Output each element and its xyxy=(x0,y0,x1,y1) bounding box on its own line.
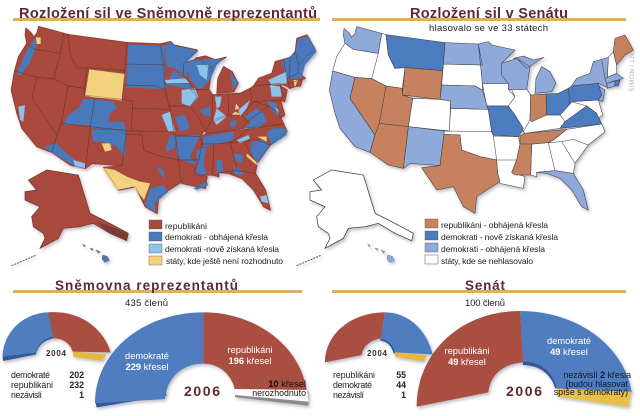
legend: Senate map: státy, kde se nehlasovalo xyxy=(441,256,533,266)
table: Senate 2004: republikáni xyxy=(333,370,375,380)
table: Senate 2004: 55 xyxy=(396,370,406,380)
title: Senate map: Rozložení sil v Senátu xyxy=(410,6,568,22)
labels: Senate 2006: spíše s demokraty) xyxy=(554,387,628,397)
legend: Senate map xyxy=(425,219,558,266)
title: Senate chart xyxy=(332,278,626,309)
legend: House map: státy, kde ještě není rozhodnuto xyxy=(166,256,283,266)
legend: Senate map: republikáni - obhájená křesla xyxy=(441,220,548,230)
labels: House 2006: republikáni xyxy=(228,345,272,355)
table: Senate 2004: demokraté xyxy=(333,380,372,390)
credit: ŠIMON / LN xyxy=(627,53,636,92)
table: House 2004: 232 xyxy=(69,380,84,390)
table: Senate 2004: nezávislí xyxy=(333,390,365,400)
labels: Senate 2006 xyxy=(445,336,631,399)
labels: Senate 2006: 49 křesel xyxy=(550,347,588,357)
labels: Senate 2006: republikáni xyxy=(445,346,489,356)
map: House districts xyxy=(11,27,317,266)
labels: House 2006: 229 křesel xyxy=(126,362,168,372)
legend: Senate map: demokrati - obhájená křesla xyxy=(441,244,545,254)
table: House 2004: nezávislí xyxy=(11,390,43,400)
label: 2004: 2004 xyxy=(367,349,388,358)
title: Senate chart: 100 členů xyxy=(465,298,505,309)
legend: House map: demokrati -nově získaná křesla xyxy=(165,244,279,254)
table: Senate 2004: 1 xyxy=(401,390,406,400)
chart: House 2006 xyxy=(95,312,308,407)
title: House map: Rozložení sil ve Sněmovně reprezentantů xyxy=(19,6,317,22)
table: House 2004: 1 xyxy=(79,390,84,400)
legend: House map: republikáni xyxy=(165,221,207,231)
labels: House 2006: nerozhodnuto xyxy=(252,388,306,398)
table: House 2004 xyxy=(11,370,84,400)
chart: Senate 2004 xyxy=(325,312,433,362)
title: Senate map: hlasovalo se ve 33 státech xyxy=(429,23,548,34)
labels: House 2006: demokraté xyxy=(125,351,169,361)
title: House chart: 435 členů xyxy=(125,298,168,309)
legend: House map xyxy=(149,220,283,266)
table: House 2004: republikáni xyxy=(11,380,53,390)
title: House chart xyxy=(13,278,302,309)
title: Senate map xyxy=(332,6,626,34)
map: Senate states xyxy=(297,27,633,266)
labels: Senate 2006: demokraté xyxy=(547,336,591,346)
title: House chart: Sněmovna reprezentantů xyxy=(55,278,238,293)
chart: Senate 2006 xyxy=(417,311,632,407)
legend: House map: demokrati - obhájená křesla xyxy=(165,232,268,242)
labels: House 2006: 196 křesel xyxy=(229,356,271,366)
table: Senate 2004: 44 xyxy=(396,380,406,390)
table: House 2004: 202 xyxy=(69,370,84,380)
label: 2004: 2004 xyxy=(46,349,67,358)
chart: House 2004 xyxy=(3,312,111,361)
labels: Senate 2006: 49 křesel xyxy=(448,357,486,367)
table: Senate 2004 xyxy=(333,370,406,400)
legend: Senate map: demokrati - nově získaná křesla xyxy=(441,232,558,242)
labels: House 2006: 2006 xyxy=(184,383,220,399)
labels: Senate 2006: 2006 xyxy=(506,383,542,399)
labels: House 2006: 10 křesel xyxy=(268,379,306,389)
title: Senate chart: Senát xyxy=(465,278,506,293)
labels: House 2006 xyxy=(125,345,306,399)
labels: Senate 2006: nezávislí 2 křesla xyxy=(564,370,631,380)
labels: Senate 2006: (budou hlasovat xyxy=(565,379,629,389)
table: House 2004: demokraté xyxy=(11,370,50,380)
